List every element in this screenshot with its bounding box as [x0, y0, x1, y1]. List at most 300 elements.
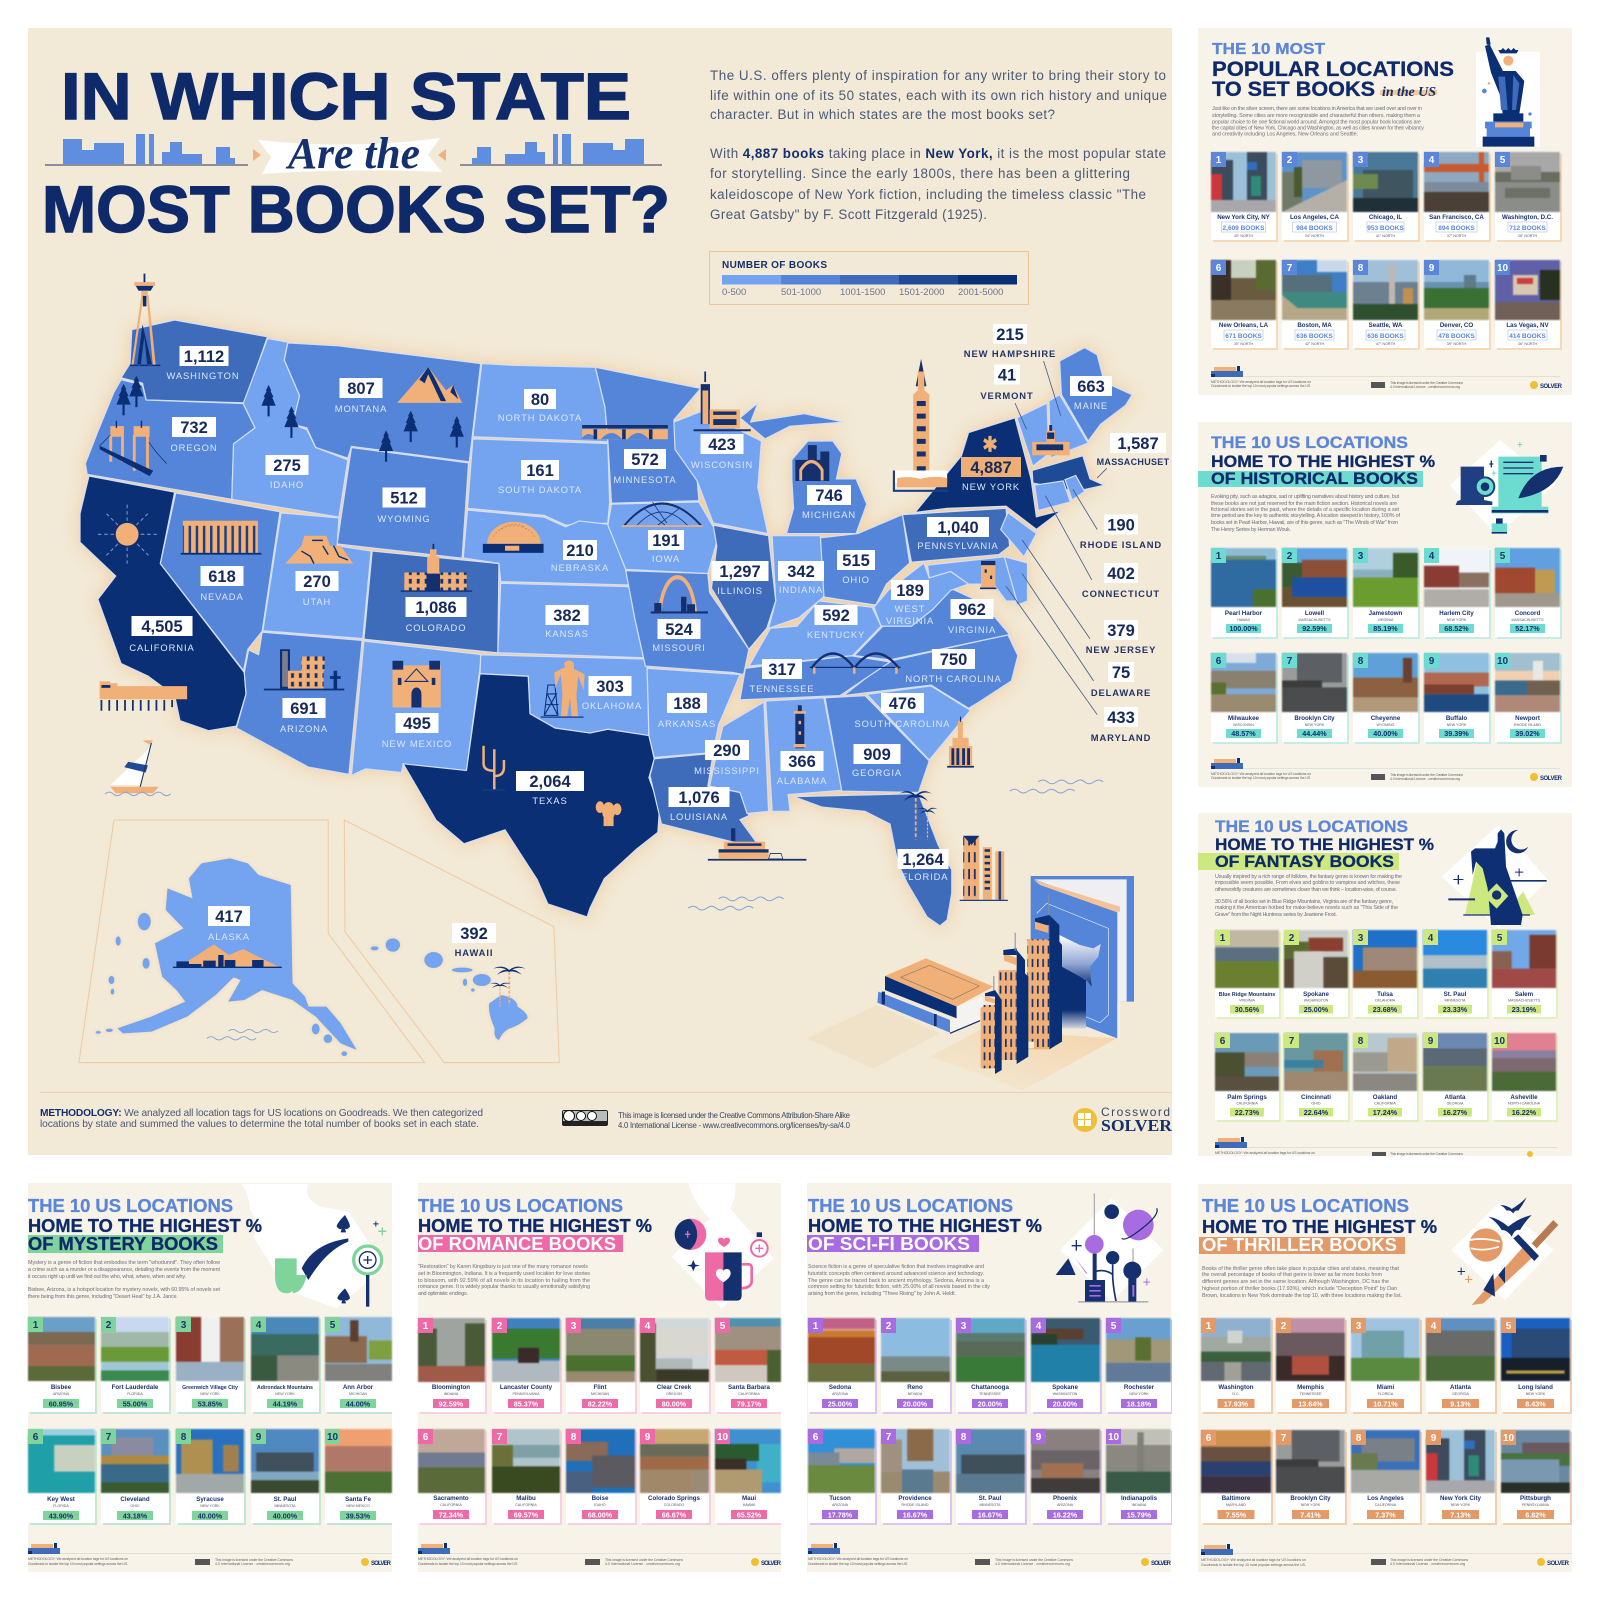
body text: Evoking pity, such as adagios, sad or uplifting narratives about history and culture, but	[1211, 494, 1400, 500]
label: Arizona	[280, 698, 328, 734]
body text: these books are not just reserved for the main fiction section. Historical novels are	[1211, 501, 1397, 507]
footer: SOLVER	[371, 1561, 392, 1567]
footer: SOLVER	[1540, 776, 1563, 782]
state: Louisiana	[650, 753, 761, 849]
card: Syracuse: 40.00%	[198, 1512, 223, 1520]
card: New York City	[1426, 1430, 1497, 1525]
state: Kansas	[498, 583, 644, 658]
card: Buffalo: 39.39%	[1444, 729, 1469, 738]
label: Kansas: KANSAS	[545, 628, 589, 639]
card: Key West	[28, 1429, 97, 1525]
panel: historical books	[1198, 422, 1572, 787]
heading: TO SET BOOKS	[1212, 78, 1375, 101]
card: Oakland: CALIFORNIA	[1374, 1102, 1396, 1106]
card: Milwaukee: WISCONSIN	[1233, 723, 1254, 727]
card: Santa Barbara: 5	[720, 1321, 726, 1332]
card: Memphis: Memphis	[1297, 1384, 1324, 1391]
card: Greenwich Village City: Greenwich Village City	[182, 1385, 238, 1391]
title	[42, 59, 670, 246]
card: Greenwich Village City: 3	[181, 1320, 187, 1331]
label: West Virginia: WEST	[895, 603, 925, 614]
card: Phoenix: ARIZONA	[1057, 1503, 1074, 1507]
card: Providence: 7	[886, 1432, 892, 1443]
state: Alabama	[766, 698, 842, 811]
card: Brooklyn City: NEW YORK	[1305, 723, 1325, 727]
state: North Dakota	[473, 364, 608, 442]
card: St. Paul: St. Paul	[1444, 991, 1467, 998]
label: Tennessee	[750, 659, 814, 694]
heading	[1212, 41, 1454, 101]
state data labels	[129, 324, 1170, 958]
card: Tucson	[808, 1429, 877, 1525]
card: Sacramento: CALIFORNIA	[440, 1503, 462, 1507]
heading: HOME TO THE HIGHEST %	[1202, 1217, 1437, 1237]
card: Bisbee	[28, 1317, 97, 1414]
card: Chattanooga: 20.00%	[978, 1400, 1003, 1408]
card: Seattle: Seattle, WA	[1369, 322, 1403, 329]
card: Fort Lauderdale: FLORIDA	[127, 1392, 143, 1396]
icon: New Mexico church	[392, 661, 441, 707]
card: Flint: 3	[571, 1321, 577, 1332]
body text: Books of the thriller genre often take place in popular cities and states, meaning that	[1202, 1266, 1400, 1272]
card: Brooklyn City: 7	[1287, 656, 1293, 667]
card: St. Paul: 4	[1428, 933, 1434, 944]
card: Santa Barbara: CALIFORNIA	[738, 1392, 760, 1396]
label: Colorado	[406, 597, 466, 633]
card: Bisbee: 1	[33, 1320, 39, 1331]
card: Denver: 9	[1429, 263, 1435, 274]
card: Harlem City	[1424, 548, 1491, 639]
state: Vermont	[1017, 403, 1049, 466]
panel: thriller books	[1198, 1184, 1572, 1572]
footer	[1211, 758, 1563, 782]
state: Maryland	[927, 557, 1017, 601]
card: Salem: 5	[1497, 933, 1503, 944]
label: Pennsylvania: 1,040	[937, 519, 979, 537]
label: Mississippi: 290	[713, 742, 741, 760]
card: Boston: 42° NORTH	[1305, 342, 1324, 346]
title: IN WHICH STATE	[61, 59, 631, 133]
card: Milwaukee: Milwaukee	[1228, 715, 1260, 722]
panel: main map infographic	[28, 28, 1173, 1155]
card: Reno: Reno	[907, 1384, 923, 1391]
card: Colorado Springs: Colorado Springs	[648, 1495, 701, 1502]
card: Milwaukee: 48.57%	[1231, 729, 1256, 738]
icon: hat, scroll, quill	[1450, 440, 1563, 535]
card: Brooklyn City: 7	[1281, 1433, 1287, 1444]
license text	[618, 1111, 851, 1130]
icon: Florida palms	[900, 791, 938, 840]
label: Oklahoma: 303	[596, 678, 624, 696]
card: Pearl Harbor: 100.00%	[1229, 624, 1258, 633]
card: Bloomington: INDIANA	[444, 1392, 459, 1396]
state: Texas	[403, 674, 660, 917]
card: Newport	[1495, 653, 1562, 744]
body text	[1202, 1266, 1402, 1299]
card: Chicago: 41° NORTH	[1376, 234, 1395, 238]
card: Asheville: Asheville	[1510, 1094, 1538, 1101]
footer	[1201, 1544, 1572, 1567]
label: Colorado: 1,086	[415, 599, 457, 617]
card: Adirondack Mountains: NEW YORK	[275, 1392, 295, 1396]
license text: 4.0 International License - www.creativecommons.org/licenses/by-sa/4.0	[618, 1121, 851, 1130]
icon: cactus	[483, 746, 505, 790]
state: Missouri	[626, 571, 749, 675]
footer: This image is licensed under the Creative Commons	[1390, 1558, 1468, 1562]
state: Maine	[1060, 348, 1132, 441]
card: Washington: D.C.	[1232, 1392, 1240, 1396]
card: Flint: 82.22%	[588, 1400, 613, 1408]
card: Clear Creek	[640, 1318, 711, 1414]
legend: number of books: 2001-5000	[958, 287, 1003, 298]
card: Reno: NEVADA	[908, 1392, 923, 1396]
card: Boston	[1282, 260, 1349, 350]
body text: the capital cities of New York, Chicago and Washington, as well as cities known for their vibrancy	[1212, 126, 1424, 132]
card: Brooklyn City: 7.41%	[1300, 1510, 1321, 1520]
card: Bisbee: 60.95%	[49, 1400, 74, 1408]
card: New Orleans: New Orleans, LA	[1219, 322, 1269, 329]
body text: Just like on the silver screen, there are some locations in America that are used over and over in	[1212, 106, 1422, 112]
card: Boston: 7	[1287, 263, 1293, 274]
card: New Orleans	[1211, 260, 1278, 350]
body text: "Restoration" by Karen Kingsbury is just one of the many romance novels	[418, 1264, 588, 1270]
card: New York City: 7.13%	[1450, 1510, 1471, 1520]
card: Los Angeles: CALIFORNIA	[1375, 1503, 1397, 1507]
card: San Francisco: 894 BOOKS	[1438, 225, 1475, 232]
card: Pearl Harbor: 1	[1216, 551, 1222, 562]
label: New Mexico: 495	[403, 715, 431, 733]
icon: Alaska lodge and mountains	[173, 944, 282, 968]
card: Fort Lauderdale	[101, 1317, 171, 1414]
intro text: kaleidoscope of New York fiction, including the timeless classic "The	[710, 187, 1146, 202]
body text: impossible seem possible. From elves and goblins to vampires and witches, these	[1215, 880, 1400, 886]
card: Cincinnati: OHIO	[1311, 1102, 1321, 1106]
label: Arkansas	[658, 693, 716, 729]
card: Lancaster County: 85.37%	[514, 1400, 539, 1408]
card: Lancaster County: PENNSYLVANIA	[512, 1392, 540, 1396]
label: Georgia	[852, 744, 902, 778]
card: Adirondack Mountains: 4	[256, 1320, 262, 1331]
card: Indianapolis: 10	[1108, 1432, 1119, 1443]
card: Asheville: 16.22%	[1512, 1108, 1537, 1117]
card: Colorado Springs: 9	[645, 1432, 651, 1443]
heading: HOME TO THE HIGHEST %	[28, 1216, 262, 1236]
card: Oakland: Oakland	[1373, 1094, 1397, 1101]
card: Washington DC	[1495, 152, 1562, 242]
body text: fictional stories set in the past, where the details of a specific location during a set	[1211, 507, 1400, 513]
card: Memphis: 2	[1281, 1321, 1287, 1332]
card: Denver	[1424, 260, 1491, 350]
state: Michigan lower peninsula	[786, 441, 867, 534]
card: Jamestown: VIRGINIA	[1378, 618, 1394, 622]
heading: in the US	[1382, 85, 1436, 100]
callouts: small state leader lines	[1006, 361, 1107, 715]
card: Lowell: Lowell	[1305, 610, 1324, 617]
label: Massachusetts: 1,587	[1117, 435, 1159, 453]
label: Oklahoma: OKLAHOMA	[582, 700, 642, 711]
footer: Goodreads to isolate the top 10 most popular settings across the US.	[1211, 384, 1311, 388]
card: Oakland: 8	[1358, 1036, 1364, 1047]
body text	[418, 1264, 590, 1297]
label: Illinois: 1,297	[719, 563, 761, 581]
label: Montana	[335, 378, 387, 414]
body text: Science fiction is a genre of speculative fiction that involves imaginative and	[808, 1264, 984, 1270]
card: Spokane: 2	[1289, 933, 1295, 944]
label: Texas	[516, 771, 584, 806]
footer: METHODOLOGY: We analyzed all location tags for US locations on	[808, 1557, 908, 1561]
card: Baltimore: MARYLAND	[1226, 1503, 1246, 1507]
card: Providence: RHODE ISLAND	[902, 1503, 929, 1507]
heading: THE 10 US LOCATIONS	[808, 1196, 1013, 1216]
label: Kentucky	[807, 605, 865, 640]
label: Louisiana: LOUISIANA	[670, 811, 728, 822]
card: San Francisco	[1424, 152, 1491, 242]
icon: Nebraska dome	[483, 522, 544, 553]
icon: New York flower	[984, 436, 996, 452]
label: North Dakota: NORTH DAKOTA	[498, 412, 582, 423]
card: Reno: 2	[886, 1321, 892, 1332]
card: Atlanta: 9.13%	[1450, 1400, 1471, 1408]
card: Tulsa	[1353, 930, 1419, 1019]
card: Reno	[881, 1318, 952, 1414]
card: St. Paul: 40.00%	[273, 1512, 298, 1520]
icon: Oklahoma statue and derrick	[541, 661, 585, 718]
state: Oregon	[85, 380, 255, 499]
state: New Mexico	[351, 641, 482, 775]
card: Greenwich Village City: NEW YORK	[200, 1392, 220, 1396]
card: Tucson: 17.78%	[828, 1510, 853, 1520]
label: Michigan	[802, 485, 856, 520]
card: Rochester: NEW YORK	[1129, 1392, 1149, 1396]
card: Syracuse: Syracuse	[196, 1496, 224, 1503]
card: Indianapolis	[1106, 1429, 1172, 1525]
label: Alabama: ALABAMA	[777, 775, 827, 786]
label: Oregon: 732	[180, 419, 208, 437]
card: Indianapolis: Indianapolis	[1121, 1495, 1158, 1502]
card: Pearl Harbor: HAWAII	[1237, 618, 1250, 622]
card: Key West: 6	[33, 1432, 39, 1443]
card: Seattle	[1353, 260, 1420, 350]
footer: 4.0 International License - creativecommons.org	[995, 1562, 1070, 1566]
heading: POPULAR LOCATIONS	[1212, 58, 1454, 81]
card: St. Paul: 9	[256, 1432, 262, 1443]
map: contiguous US states	[80, 320, 1132, 926]
label: Georgia: 909	[863, 746, 891, 764]
legend: number of books: 501-1000	[781, 287, 821, 298]
card: Adirondack Mountains: Adirondack Mountains	[257, 1385, 313, 1391]
intro text	[710, 68, 1167, 222]
label: Illinois: ILLINOIS	[717, 585, 763, 596]
card: Newport: 39.02%	[1515, 729, 1540, 738]
icon: Hawaii palms	[490, 967, 525, 1008]
label: Oregon: OREGON	[170, 442, 218, 453]
icons east: landmarks	[581, 359, 1107, 910]
state: Tennessee	[740, 656, 890, 700]
card: Brooklyn City: NEW YORK	[1301, 1503, 1321, 1507]
card: Maui	[715, 1429, 781, 1525]
state: New Jersey	[1001, 513, 1036, 557]
state: Nevada	[160, 493, 280, 671]
card: Rochester: Rochester	[1124, 1384, 1155, 1391]
label: Tennessee: TENNESSEE	[750, 683, 814, 694]
label: New Mexico	[382, 713, 452, 749]
footer: 4.0 International License - creativecommons.org	[1390, 385, 1460, 389]
card: New York City: 40° NORTH	[1234, 234, 1253, 238]
heading: THE 10 MOST	[1212, 41, 1325, 58]
card: Sedona: Sedona	[829, 1384, 852, 1391]
card: Chicago: 953 BOOKS	[1367, 225, 1404, 232]
card: Santa Fe: Santa Fe	[345, 1496, 371, 1503]
card: Atlanta: Atlanta	[1445, 1094, 1466, 1101]
icon: Wisconsin capitol	[694, 372, 751, 431]
card: Key West: Key West	[47, 1496, 75, 1503]
state: North Carolina	[844, 635, 1018, 708]
card: Newport: Newport	[1515, 715, 1540, 722]
skyline right	[460, 134, 662, 166]
card: Cleveland	[101, 1429, 171, 1525]
card: Las Vegas: 36° NORTH	[1518, 342, 1537, 346]
license text: This image is licensed under the Creative Commons Attribution-Share Alike	[618, 1111, 850, 1120]
card: Las Vegas: 10	[1497, 263, 1508, 274]
label: Utah: 270	[303, 573, 331, 591]
card: Pittsburgh: 6.82%	[1525, 1510, 1546, 1520]
body text: it occurs right up until we find out the who, what, where, when and why.	[28, 1274, 186, 1280]
card: New Orleans: 6	[1216, 263, 1222, 274]
footer: This image is licensed under the Creative Commons	[1390, 1152, 1463, 1156]
label: Montana: MONTANA	[335, 403, 387, 414]
card: Pittsburgh: PENNSYLVANIA	[1522, 1503, 1550, 1507]
card: Lowell: MASSACHUSETTS	[1299, 618, 1331, 622]
card: Santa Barbara: Santa Barbara	[728, 1384, 771, 1391]
body text: to blossom, with 92.59% of all novels in its location to hailing from the	[418, 1278, 590, 1284]
card: Tucson: ARIZONA	[832, 1503, 849, 1507]
card: St. Paul: St. Paul	[979, 1495, 1002, 1502]
waves: ocean	[688, 780, 1103, 910]
card: Memphis: TENNESSEE	[1300, 1392, 1322, 1396]
card: Spokane	[1284, 930, 1350, 1019]
state: South Carolina	[867, 686, 970, 760]
heading: HOME TO THE HIGHEST %	[1211, 452, 1435, 471]
label: Nevada: 618	[208, 568, 236, 586]
card: Salem: 23.19%	[1512, 1005, 1537, 1014]
label: Connecticut: CONNECTICUT	[1082, 588, 1160, 599]
card: Syracuse: NEW YORK	[200, 1504, 220, 1508]
body text: making it the American hotbed for make-believe novels such as "This Side of the	[1215, 905, 1398, 911]
state: Oklahoma	[480, 655, 649, 736]
card: Tulsa: Tulsa	[1377, 991, 1393, 998]
card: Atlanta: Atlanta	[1450, 1384, 1472, 1391]
label: Nebraska: 210	[566, 542, 594, 560]
card: Seattle: 47° NORTH	[1376, 342, 1395, 346]
body text: and optimistic endings.	[418, 1291, 468, 1297]
card: Bisbee: Bisbee	[51, 1384, 72, 1391]
state: Wisconsin	[674, 412, 768, 534]
card: Sedona	[808, 1318, 877, 1414]
card: Chattanooga: TENNESSEE	[979, 1392, 1001, 1396]
card: Jamestown: 85.19%	[1373, 624, 1398, 633]
label: South Carolina: 476	[889, 695, 916, 713]
footer: Goodreads to isolate the top 10 most popular settings across the US.	[808, 1562, 908, 1566]
card: Atlanta: GEORGIA	[1452, 1392, 1469, 1396]
card: Fort Lauderdale: 2	[106, 1320, 112, 1331]
card: San Francisco: 37° NORTH	[1447, 234, 1466, 238]
card: Palm Springs: Palm Springs	[1227, 1094, 1267, 1101]
card: Baltimore: 6	[1206, 1433, 1212, 1444]
card: New York City: 1	[1216, 155, 1222, 166]
heading: THE 10 US LOCATIONS	[1215, 817, 1408, 836]
card: Santa Fe	[325, 1429, 392, 1525]
state: Indiana	[769, 536, 824, 628]
heading	[807, 1196, 1042, 1254]
card: Syracuse	[176, 1429, 246, 1525]
footer: This image is licensed under the Creative Commons	[215, 1558, 293, 1562]
label: North Dakota: 80	[531, 391, 549, 409]
card: Rochester: 18.18%	[1127, 1400, 1152, 1408]
card: New York City	[1211, 152, 1278, 242]
state: Hawaii	[371, 938, 528, 1040]
card: Brooklyn City: Brooklyn City	[1294, 715, 1335, 722]
label: Oklahoma	[582, 676, 642, 711]
card: Ann Arbor: 44.00%	[346, 1400, 371, 1408]
state: Wyoming	[337, 447, 469, 558]
label: Missouri: MISSOURI	[652, 642, 706, 653]
card: Ann Arbor: MICHIGAN	[349, 1392, 367, 1396]
label: Illinois	[712, 561, 768, 596]
methodology: locations by state and summed the values to determine the total number of books set in each state.	[40, 1119, 479, 1130]
label: New Jersey: 379	[1107, 622, 1135, 640]
card: Providence: Providence	[898, 1495, 932, 1502]
card: Phoenix: Phoenix	[1053, 1495, 1078, 1502]
skyline left	[45, 134, 248, 166]
card: Harlem City: 68.52%	[1444, 624, 1469, 633]
card: Rochester: 5	[1111, 1321, 1117, 1332]
card: Washington: Washington	[1218, 1384, 1254, 1391]
card: Brooklyn City: Brooklyn City	[1290, 1495, 1331, 1502]
label: South Dakota: SOUTH DAKOTA	[498, 484, 582, 495]
card: Chicago: 3	[1358, 155, 1364, 166]
icon: Charleston church	[947, 717, 974, 768]
label: Wyoming: WYOMING	[377, 513, 431, 524]
label: Washington	[166, 346, 240, 381]
footer: 4.0 International License - creativecommons.org	[215, 1562, 290, 1566]
card: Milwaukee	[1211, 653, 1278, 744]
card: Los Angeles: Los Angeles	[1367, 1495, 1404, 1502]
label: New Hampshire	[964, 324, 1056, 359]
card: Los Angeles	[1282, 152, 1349, 242]
icon: wizard tower and moon	[1442, 825, 1548, 928]
card: Flint: Flint	[593, 1384, 607, 1391]
label: Delaware: DELAWARE	[1091, 687, 1151, 698]
icon: Utah mesas	[285, 536, 353, 564]
footer: Goodreads to isolate the top 10 most popular settings across the US.	[28, 1562, 128, 1566]
state: Massachusetts	[1032, 456, 1104, 491]
icon: trees	[116, 376, 464, 462]
footer: SOLVER	[761, 1561, 782, 1567]
icon: Iowa bridge	[622, 502, 702, 526]
card: Greenwich Village City: 53.85%	[198, 1400, 223, 1408]
card: Cincinnati	[1284, 1033, 1350, 1122]
footer	[28, 1543, 392, 1567]
icon: Michigan city	[795, 445, 829, 481]
card: Washington	[1201, 1318, 1273, 1414]
card: Tulsa: 3	[1358, 933, 1364, 944]
label: Alabama: 366	[788, 753, 816, 771]
body text: highest portion of thriller books (17.93%), which include "Deception Point" by Dan	[1202, 1286, 1397, 1292]
state: Ohio	[820, 515, 910, 605]
label: New York: 4,887	[970, 459, 1012, 477]
card: Cheyenne	[1353, 653, 1420, 744]
footer: 4.0 International License - creativecommons.org	[605, 1562, 680, 1566]
